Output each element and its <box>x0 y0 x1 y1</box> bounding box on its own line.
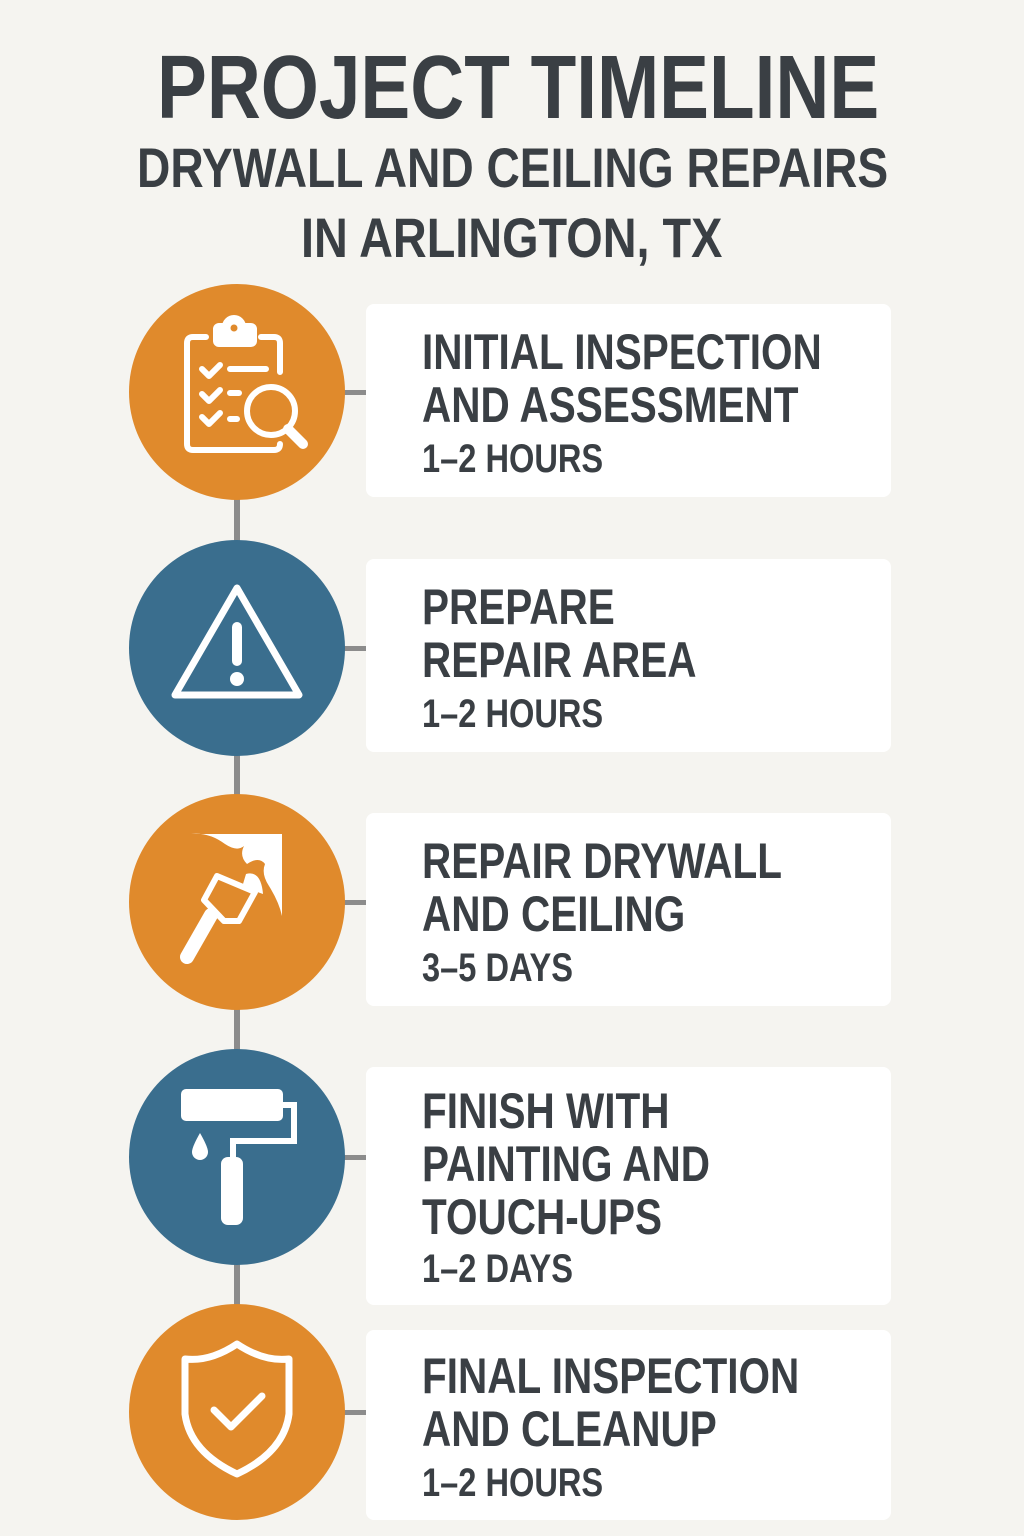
subtitle <box>137 136 888 269</box>
panel: step 1: INITIAL INSPECTION <box>422 324 822 380</box>
panel: step 4: 1–2 DAYS <box>422 1247 573 1291</box>
panel: step 3: AND CEILING <box>422 886 685 942</box>
timeline connector <box>234 400 240 1410</box>
panel: step 3 <box>366 813 891 1006</box>
panel: step 4: TOUCH-UPS <box>422 1189 662 1245</box>
panel: step 5: FINAL INSPECTION <box>422 1348 799 1404</box>
panel: step 2: PREPARE <box>422 579 615 635</box>
panel: step 3: REPAIR DRYWALL <box>422 833 782 889</box>
subtitle: DRYWALL AND CEILING REPAIRS <box>137 136 888 199</box>
panel: step 3: 3–5 DAYS <box>422 946 573 990</box>
panel: step 1 <box>366 304 891 497</box>
panel: step 4: PAINTING AND <box>422 1136 710 1192</box>
panel: step 1: 1–2 HOURS <box>422 437 603 481</box>
icon: clipboard inspection <box>129 284 345 500</box>
panel: step 2: 1–2 HOURS <box>422 692 603 736</box>
panel: step 4 <box>366 1067 891 1305</box>
panel: step 5: AND CLEANUP <box>422 1401 717 1457</box>
subtitle: IN ARLINGTON, TX <box>301 206 722 269</box>
icon: warning <box>129 540 345 756</box>
icon: paint roller <box>129 1049 345 1265</box>
panel: step 1: AND ASSESSMENT <box>422 377 799 433</box>
panel: step 5: 1–2 HOURS <box>422 1461 603 1505</box>
panel: step 2 <box>366 559 891 752</box>
panel: step 2: REPAIR AREA <box>422 632 697 688</box>
panel: step 4: FINISH WITH <box>422 1083 669 1139</box>
icon: shield check <box>129 1304 345 1520</box>
panel: step 5 <box>366 1330 891 1520</box>
title: PROJECT TIMELINE <box>157 38 879 138</box>
icon: trowel repair <box>129 794 345 1010</box>
